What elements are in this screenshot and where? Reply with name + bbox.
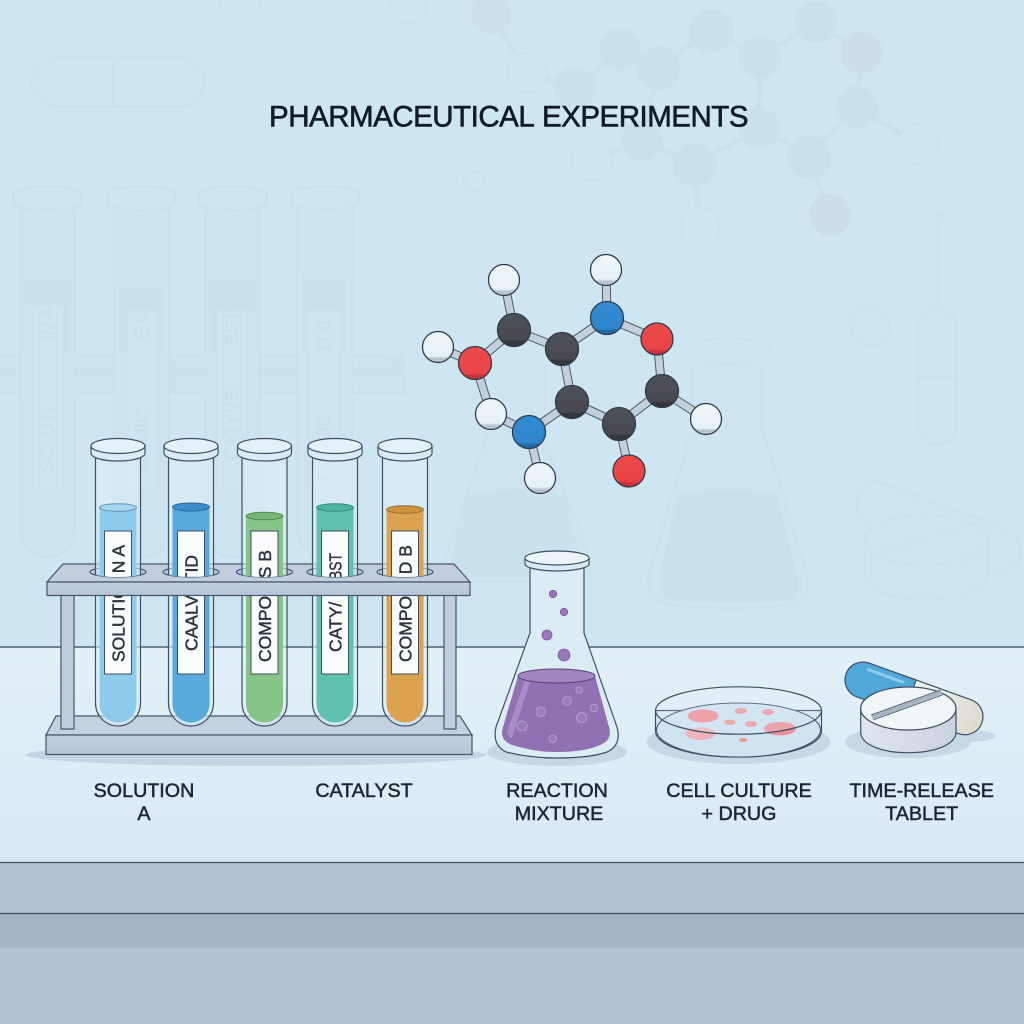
capsule	[840, 657, 988, 740]
tube: catalyst acid	[164, 438, 218, 726]
tube: catalyst: CATY/	[326, 602, 346, 652]
label: reaction mixture: MIXTURE	[515, 803, 603, 825]
rack holes	[90, 567, 433, 577]
ghost background illustrations	[0, 0, 1021, 608]
tube: compound S B: S B	[255, 550, 275, 578]
molecule model	[422, 254, 722, 494]
petri dish	[646, 687, 830, 764]
rising bubbles	[542, 590, 570, 661]
tube: solution A: N A	[108, 545, 128, 573]
dish lid	[656, 687, 822, 734]
tube: catalyst acid: TID	[182, 555, 202, 583]
reaction flask	[487, 551, 627, 766]
rack base	[46, 716, 472, 754]
ghost tube labels: BST	[222, 310, 242, 345]
label: catalyst: CATALYST	[315, 780, 413, 802]
ghost capsule top left	[31, 58, 205, 107]
label: time-release tablet: TABLET	[885, 803, 958, 825]
rack shadow	[26, 744, 486, 766]
flask rim	[525, 551, 589, 571]
tube: compound S B: COMPO	[255, 596, 275, 662]
tube: solution A	[91, 438, 145, 726]
ghost tube labels: LCOPOC	[314, 414, 334, 490]
dish shadow	[646, 720, 830, 764]
ghost tube labels: E B	[132, 311, 152, 340]
rack top surface	[47, 564, 470, 582]
ghost tablet and capsule	[850, 212, 1021, 600]
ghost tube labels: SOLUTI	[38, 407, 58, 472]
lab counter	[0, 647, 1024, 1024]
tube: solution A: SOLUTIO	[108, 585, 128, 662]
ghost tube labels: D B	[314, 320, 334, 350]
label: reaction mixture: REACTION	[506, 780, 608, 802]
ghost test tubes and rack	[0, 186, 405, 558]
capsule and tablet	[840, 657, 995, 758]
test tube rack with five tubes	[26, 438, 486, 766]
tube: catalyst acid: CAALV	[182, 595, 202, 651]
molecule bonds	[438, 270, 706, 478]
flask shadow	[487, 738, 627, 766]
ghost tube labels: OMMIC	[132, 410, 152, 472]
ghost flask right	[648, 338, 808, 608]
flask liquid	[502, 676, 610, 752]
molecule atoms	[422, 254, 722, 494]
pill shadow	[845, 726, 971, 758]
wall background	[0, 0, 1024, 648]
label: cell culture + drug: CELL CULTURE	[666, 780, 812, 802]
tablet	[861, 687, 956, 753]
label: solution A: SOLUTION	[94, 780, 194, 802]
ghost flask left	[444, 365, 591, 582]
tube: compound B: D B	[396, 545, 416, 574]
item labels	[94, 780, 994, 825]
title: PHARMACEUTICAL EXPERIMENTS	[269, 100, 748, 134]
tube: compound B: COMPOU	[396, 583, 416, 662]
label: cell culture + drug: + DRUG	[702, 803, 776, 825]
cell colonies	[686, 708, 796, 742]
tube: catalyst	[308, 438, 362, 726]
liquid bubbles	[517, 687, 598, 742]
ghost tube labels	[38, 306, 334, 490]
label: solution A: A	[137, 803, 151, 825]
flask glass	[495, 568, 618, 758]
rack legs	[61, 595, 456, 729]
ghost tube labels: CATYVE	[222, 389, 242, 460]
tube: compound S B	[238, 438, 292, 726]
tubes	[91, 438, 432, 726]
tube: catalyst: BST	[326, 553, 346, 580]
rack front face	[47, 582, 470, 596]
dish base	[656, 710, 822, 757]
ghost molecule	[220, 0, 938, 248]
label: time-release tablet: TIME-RELEASE	[849, 780, 994, 802]
tube: compound B	[378, 438, 432, 726]
ghost tube labels: IN A	[38, 306, 58, 340]
